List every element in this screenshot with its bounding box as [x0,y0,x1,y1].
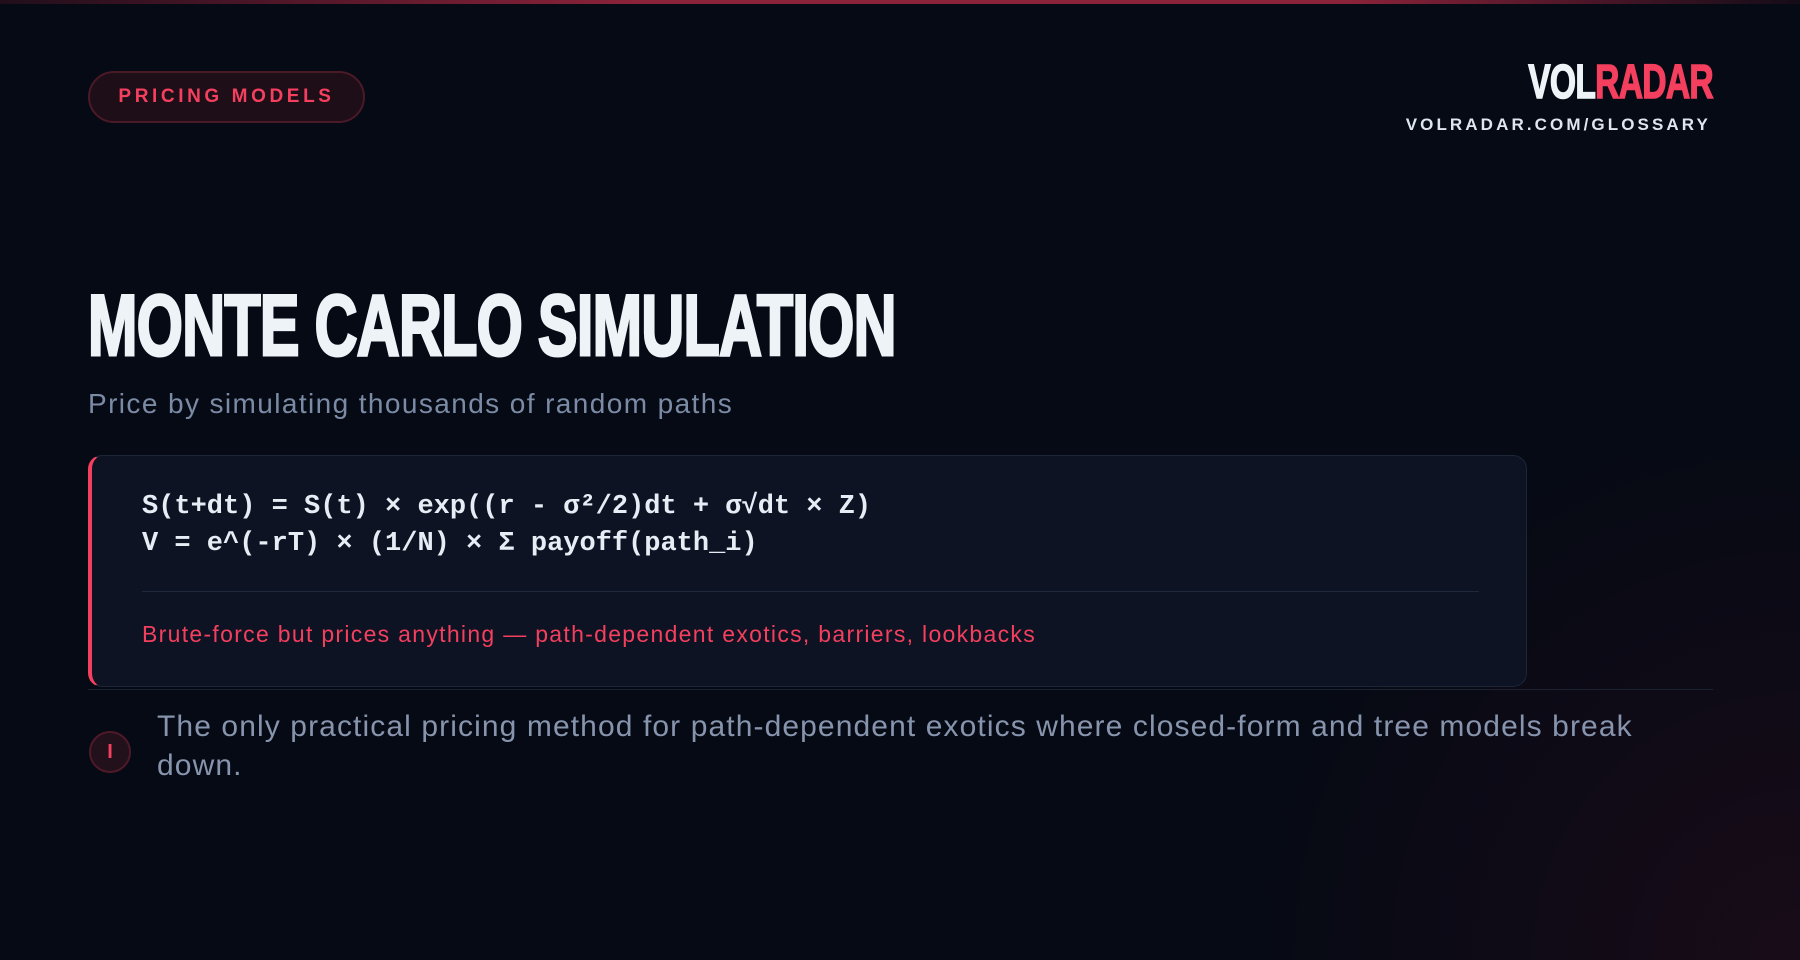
icon: info: I [107,740,113,762]
formula box [88,455,1527,687]
subtitle: Price by simulating thousands of random paths [88,388,733,419]
logo: VOLRADAR [1528,56,1713,109]
logo url: VOLRADAR.COM/GLOSSARY [1406,115,1711,134]
category pill [88,71,365,123]
note text: The only practical pricing method for path-dependent exotics where closed-form and tree models break down. [157,710,1633,782]
formula lines: S(t+dt) = S(t) × exp((r - σ²/2)dt + σ√dt × Z) V = e^(-rT) × (1/N) × Σ payoff(path_i) [142,492,871,559]
key insight: Brute-force but prices anything — path-dependent exotics, barriers, lookbacks [142,621,1036,647]
category pill: PRICING MODELS [118,86,335,107]
icon: info [89,731,131,773]
title: MONTE CARLO SIMULATION [88,278,896,374]
